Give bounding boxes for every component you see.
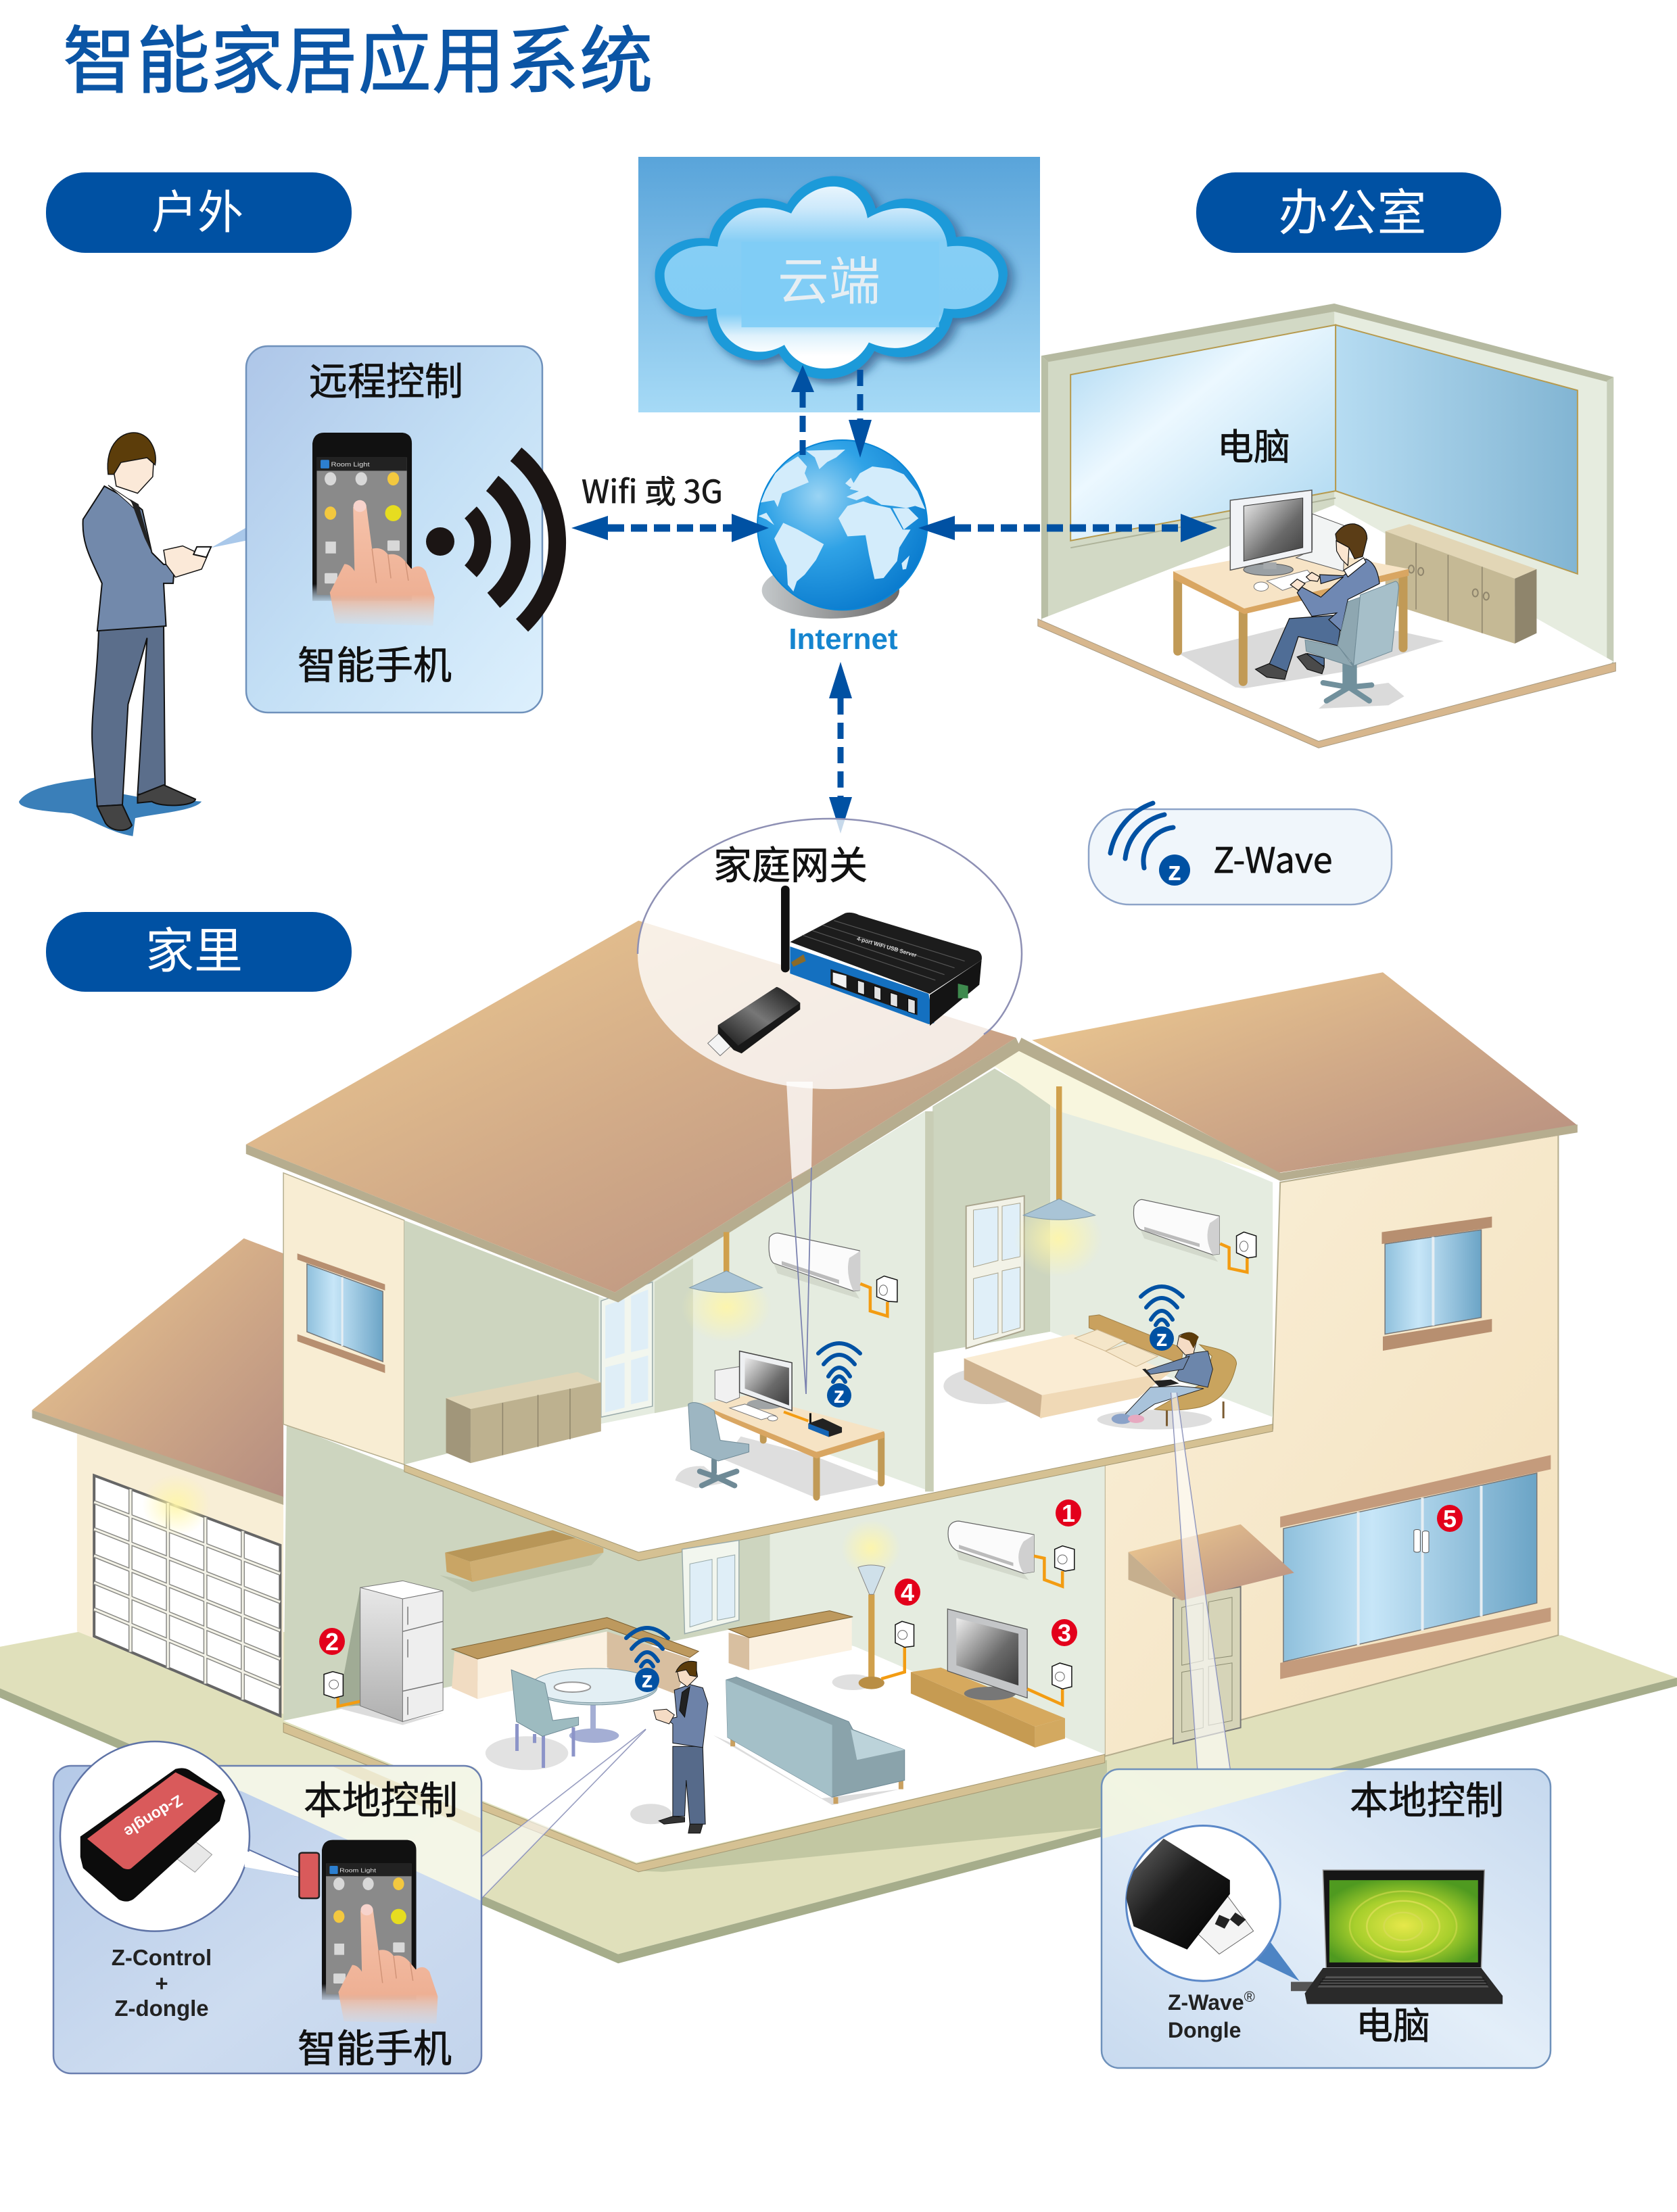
air conditioner three bbox=[948, 1521, 1074, 1587]
number markers: 1 bbox=[1062, 1499, 1075, 1527]
callout: home gateway bbox=[638, 819, 1022, 1089]
heading: remote control: 远程控制 bbox=[309, 351, 463, 406]
callout circle with USB dongle bbox=[1125, 1825, 1300, 1981]
label: z-control plus z-dongle bbox=[112, 1945, 212, 2021]
study desk and computer bbox=[700, 1351, 884, 1497]
outdoor man with phone bbox=[19, 433, 245, 836]
big window lower sill bbox=[1280, 1608, 1551, 1679]
dining table and chair bbox=[486, 1668, 657, 1770]
fridge and outlet bbox=[324, 1581, 444, 1725]
study floor shadow bbox=[675, 1437, 884, 1497]
heading: home gateway: 家庭网关 bbox=[713, 835, 868, 890]
label: z-wave dongle: ® bbox=[1244, 1988, 1255, 2005]
right exterior wall bbox=[1105, 1135, 1558, 1756]
gateway router bbox=[781, 886, 982, 1026]
icon: z-wave room two bbox=[1141, 1287, 1183, 1351]
globe: internet bbox=[757, 440, 927, 619]
seated worker bbox=[1256, 524, 1379, 679]
awning and front door bbox=[1129, 1524, 1551, 1744]
pill: office: 办公室 bbox=[1278, 173, 1427, 245]
right wall window bbox=[1381, 1216, 1492, 1351]
office cabinet bbox=[1386, 524, 1536, 644]
legend: z-wave: Z-Wave bbox=[1213, 832, 1333, 883]
ground floor base bbox=[283, 1621, 1105, 1872]
upstairs furniture bbox=[675, 1086, 1256, 1497]
upper left cream wall bbox=[283, 1173, 404, 1464]
air conditioner one bbox=[769, 1233, 860, 1299]
laptop bbox=[1291, 1870, 1503, 2004]
pendant lamp two bbox=[1014, 1086, 1102, 1277]
title: 智能家居应用系统 bbox=[63, 3, 654, 108]
upper left window bbox=[298, 1253, 385, 1373]
gateway router: 4-port WiFi USB Server bbox=[856, 935, 918, 959]
office chair bbox=[1305, 581, 1398, 701]
icon: z-wave living room bbox=[626, 1628, 668, 1693]
panel: local control computer bbox=[1102, 1769, 1551, 2068]
right roof bbox=[1016, 972, 1578, 1181]
label: z-wave dongle bbox=[1168, 1988, 1255, 2042]
smartphone with hand bbox=[312, 433, 435, 626]
wall cabinet bbox=[440, 1530, 603, 1592]
upper floor edge bbox=[404, 1424, 1273, 1561]
office room bbox=[1038, 304, 1615, 748]
smartphone with hand: Room Light bbox=[331, 462, 370, 468]
arrows: cloud to internet bbox=[791, 365, 872, 458]
panel: remote control bbox=[246, 346, 542, 713]
pill: outdoor: 户外 bbox=[151, 175, 243, 242]
pill: outdoor bbox=[46, 172, 352, 253]
TV and stand bbox=[911, 1609, 1072, 1748]
icon: z-wave room one bbox=[818, 1343, 860, 1408]
heading: smartphone: 智能手机 bbox=[298, 2018, 452, 2073]
heading: smartphone: 智能手机 bbox=[298, 635, 452, 690]
air conditioner two bbox=[1133, 1199, 1219, 1261]
computer bbox=[1230, 490, 1346, 591]
pendant lamp one bbox=[682, 1232, 772, 1342]
upstairs room one bbox=[404, 1111, 928, 1552]
dongle label: Z-dongle bbox=[121, 1792, 186, 1842]
legend: z-wave bbox=[1089, 803, 1392, 905]
number markers: 4 bbox=[901, 1579, 914, 1606]
smartphone with dongle: Room Light bbox=[339, 1867, 377, 1874]
house structure bbox=[32, 921, 1578, 1756]
icon: z-wave room one: z bbox=[833, 1382, 845, 1408]
cloud bbox=[655, 176, 1008, 379]
main roof bbox=[246, 921, 1021, 1302]
icon: z-wave living room: z bbox=[641, 1667, 653, 1693]
label: z-control plus z-dongle: + bbox=[155, 1971, 168, 1996]
ground plane bbox=[0, 1631, 1677, 1963]
number markers: 3 bbox=[1058, 1619, 1071, 1647]
icon: z-wave room two: z bbox=[1156, 1326, 1167, 1351]
cloud backdrop bbox=[638, 157, 1040, 412]
label: wifi or 3G: Wifi 或 3G bbox=[582, 466, 723, 512]
study chair bbox=[688, 1403, 749, 1486]
panel: local control smartphone bbox=[53, 1741, 481, 2073]
label: z-wave dongle: Dongle bbox=[1168, 2018, 1241, 2042]
legend: z-wave: z bbox=[1168, 857, 1181, 886]
label: z-control plus z-dongle: Z-dongle bbox=[114, 1996, 209, 2021]
cabinet upstairs bbox=[446, 1372, 601, 1463]
garage bbox=[32, 1239, 283, 1716]
office label: 电脑 bbox=[1217, 417, 1290, 471]
light beams bbox=[481, 1082, 1230, 1898]
heading: local control: 本地控制 bbox=[1350, 1770, 1504, 1825]
pill: home: 家里 bbox=[145, 911, 243, 982]
label: internet: Internet bbox=[788, 623, 898, 656]
bedroom door bbox=[966, 1196, 1024, 1349]
ground floor furniture bbox=[324, 1520, 1074, 1833]
label: computer: 电脑 bbox=[1356, 1996, 1430, 2050]
seated man with laptop bbox=[1097, 1332, 1237, 1429]
label: z-wave dongle: Z-Wave bbox=[1168, 1990, 1244, 2015]
big window bbox=[1280, 1455, 1551, 1662]
office workstation bbox=[1173, 490, 1444, 708]
bed bbox=[943, 1315, 1183, 1418]
USB dongle bbox=[708, 987, 800, 1056]
outlet and wire one bbox=[860, 1276, 897, 1316]
number markers bbox=[319, 1499, 1463, 1656]
upstairs room two bbox=[925, 1050, 1273, 1491]
ground floor walls bbox=[283, 1424, 1105, 1755]
label: z-control plus z-dongle: Z-Control bbox=[112, 1945, 212, 1970]
smartphone with dongle bbox=[299, 1840, 438, 2023]
cloud label: 云端 bbox=[778, 240, 880, 314]
number markers: 2 bbox=[325, 1628, 339, 1656]
kitchen counters bbox=[452, 1611, 853, 1699]
ground floor door bbox=[682, 1540, 739, 1634]
number markers: 5 bbox=[1443, 1505, 1457, 1533]
standing man with phone bbox=[630, 1661, 708, 1833]
arrow: internet to gateway bbox=[829, 662, 852, 834]
desk bbox=[1173, 548, 1409, 681]
floor lamp bbox=[832, 1520, 914, 1690]
icon: wireless signal bbox=[426, 454, 557, 625]
pill: office bbox=[1196, 172, 1501, 253]
heading: local control: 本地控制 bbox=[304, 1770, 458, 1825]
callout circle with Z-dongle bbox=[60, 1741, 315, 1931]
sofa bbox=[713, 1677, 905, 1805]
pill: home bbox=[46, 911, 352, 992]
floor shadows bbox=[1179, 627, 1444, 708]
arrow: phone to internet bbox=[571, 514, 769, 542]
arrow: internet to office bbox=[918, 514, 1217, 542]
outlet and wire two bbox=[1220, 1232, 1256, 1272]
